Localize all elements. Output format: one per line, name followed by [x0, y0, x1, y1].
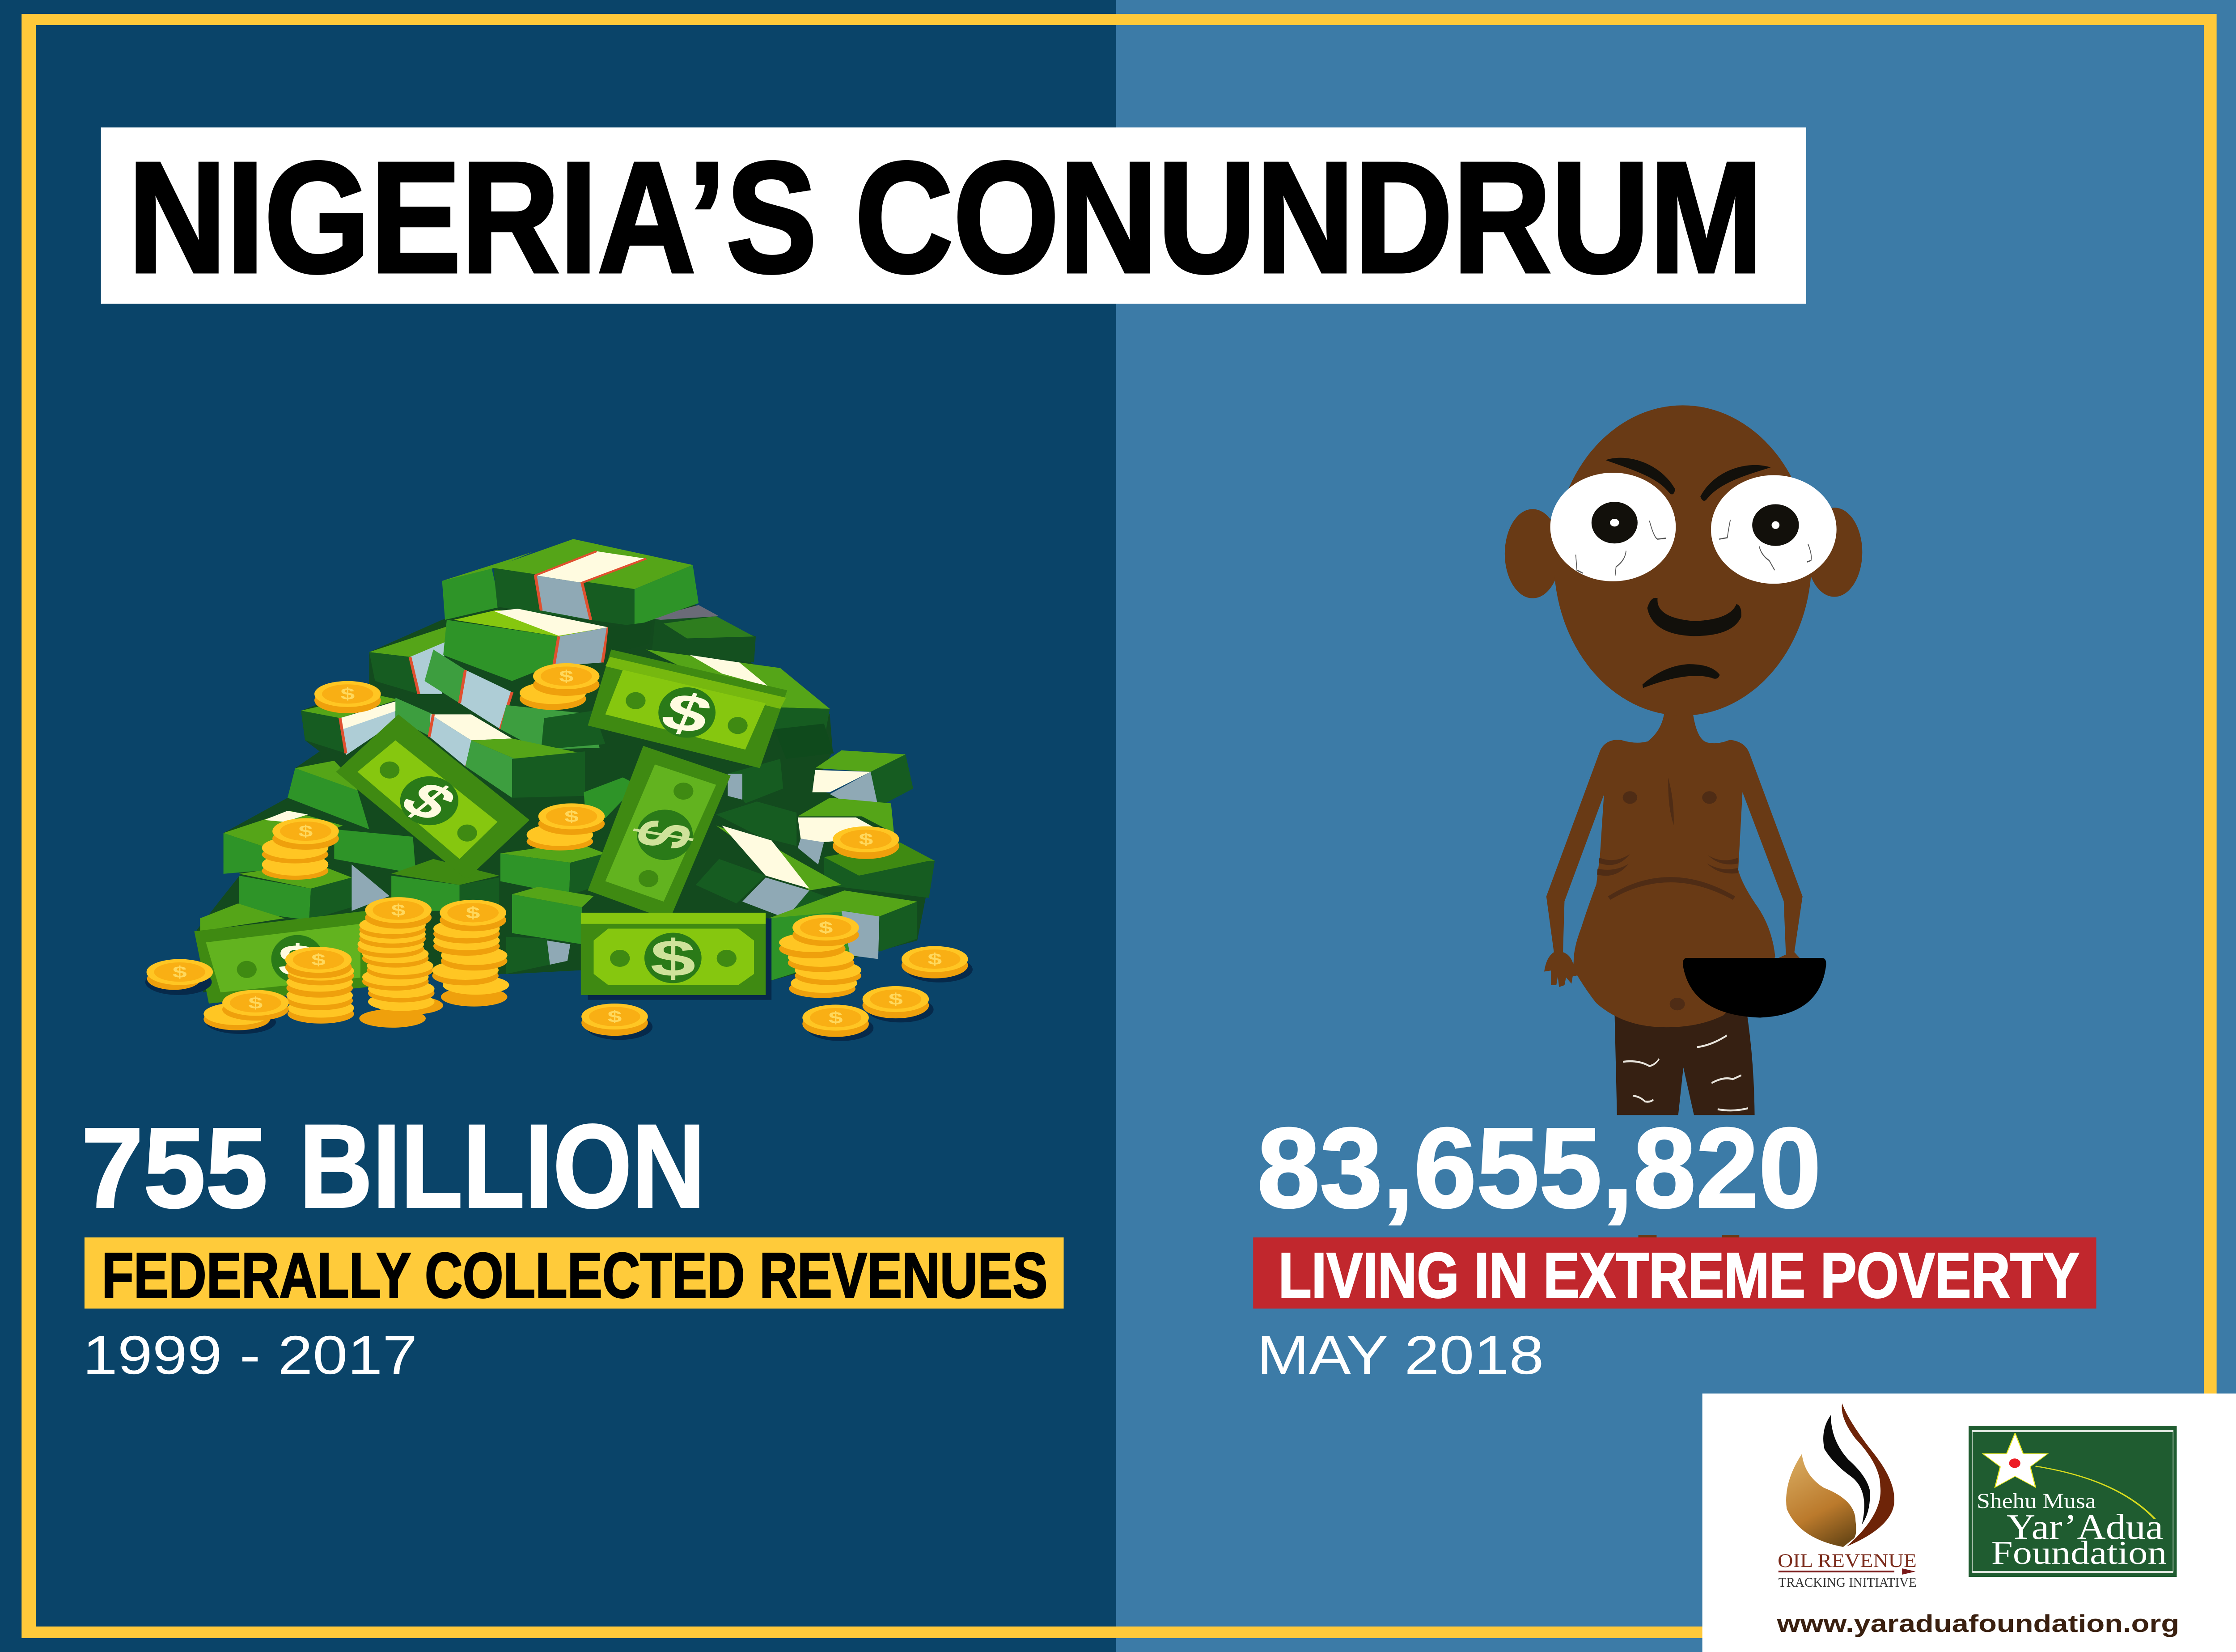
- bundle: lower middle: [506, 937, 570, 974]
- coins: tall stack centre right: $: [466, 904, 480, 922]
- left date: 1999 - 2017: [83, 1324, 417, 1385]
- coins: stack upper centre: [520, 663, 600, 710]
- coins: stack mid centre: $: [564, 807, 579, 826]
- coins: single on left brick: [314, 681, 381, 713]
- left stat: revenue figure: BILLION: [299, 1100, 705, 1233]
- logo: oil revenue tracking initiative: OIL REVENUE: [1778, 1550, 1917, 1572]
- bundle: lower centre left: [391, 859, 499, 911]
- logo panel: [1702, 1394, 2236, 1652]
- left label banner: FEDERALLY COLLECTED REVENUES: [102, 1240, 1048, 1311]
- bundle: top of pile: [442, 539, 699, 626]
- bundle: centre left: [395, 698, 585, 798]
- coins: pair bottom left: $: [248, 994, 263, 1012]
- body details: [1597, 778, 1738, 1010]
- pile shadow base: [197, 603, 926, 992]
- illustration: pile of money: [145, 539, 973, 1041]
- coins: stack lower right: [779, 915, 861, 998]
- coins: stack lower right: $: [818, 919, 833, 937]
- coin: right on brick: [833, 826, 899, 859]
- coins: stack left: [262, 818, 339, 880]
- bundle: second tier: [443, 609, 652, 681]
- feet stubs behind the red banner: [1639, 1235, 1739, 1238]
- banknote: upper right: $: [653, 682, 720, 745]
- logo: Shehu Musa Yar'Adua Foundation: Foundation: [1991, 1534, 2167, 1571]
- coin: floor right bottom: [802, 1005, 873, 1041]
- coins: stack mid centre: [527, 803, 605, 851]
- bundle: back upper right: [649, 605, 756, 662]
- banknote: left: $: [386, 772, 471, 831]
- coins: tall stack centre right: [432, 900, 509, 1007]
- logo: Shehu Musa Yar'Adua Foundation: Yar’Adua: [2007, 1507, 2163, 1547]
- bundle: left: [224, 811, 416, 874]
- bundle: centre: [500, 777, 637, 944]
- ears: [1505, 508, 1862, 598]
- logo: oil revenue tracking initiative: TRACKING INITIATIVE: [1779, 1575, 1917, 1590]
- bundle: slanted third tier: [424, 649, 606, 750]
- eyes: [1550, 473, 1837, 584]
- coins: front left stack: [285, 947, 354, 1024]
- coin: floor right middle: [863, 986, 934, 1022]
- left stat: revenue figure: [81, 1100, 705, 1233]
- coin: floor right top: $: [927, 950, 942, 968]
- banknote: centre: $: [618, 815, 710, 855]
- coins: pair bottom left: [203, 990, 289, 1034]
- body: [1544, 710, 1803, 1027]
- banknote: left: [336, 714, 529, 879]
- panel: left dark blue background: [0, 0, 1116, 1652]
- banknote: front left: [194, 911, 369, 1004]
- coin: far left: [145, 959, 213, 995]
- logo: Shehu Musa Yar'Adua Foundation: [1969, 1426, 2177, 1577]
- coin: floor right top: [902, 946, 973, 983]
- eyebrows: [1605, 458, 1771, 501]
- bundle: lower right: [769, 890, 917, 981]
- banknote: front left: $: [278, 936, 317, 985]
- bundle: middle left block: [288, 761, 369, 829]
- bundle: far right: [812, 750, 913, 818]
- right stat: poverty figure: 83,655,820: [1257, 1105, 1821, 1232]
- logo: Shehu Musa Yar'Adua Foundation: Shehu Musa: [1977, 1489, 2096, 1513]
- coins: tall stack centre left: [357, 897, 443, 1028]
- bundle: upper left: [369, 626, 448, 694]
- coin: floor centre: $: [607, 1008, 622, 1026]
- coins: stack left: $: [298, 822, 313, 840]
- panel: right light blue background: [1116, 0, 2236, 1652]
- banknote: centre: [588, 746, 731, 920]
- logo: oil revenue tracking initiative: [1778, 1403, 1917, 1590]
- banknote: front: $: [650, 930, 696, 987]
- coins: front left stack: $: [311, 951, 326, 969]
- trousers: [1614, 1010, 1755, 1115]
- bundle: right middle: [716, 759, 935, 898]
- coins: tall stack centre left: $: [391, 901, 406, 919]
- bundle: slanted right: [696, 826, 850, 918]
- bundle: lower left: [239, 863, 390, 920]
- banknote: front: [581, 913, 771, 1000]
- nose: [1647, 598, 1741, 636]
- bundle: right behind note: [646, 649, 834, 759]
- banknote: upper right: [588, 649, 787, 768]
- left stat: revenue figure: 755: [81, 1105, 268, 1232]
- bundle: left with coin: [301, 694, 398, 762]
- coin: floor right middle: $: [889, 990, 903, 1008]
- coins: stack upper centre: $: [559, 667, 574, 686]
- begging bowl: [1683, 958, 1826, 1017]
- coins: single on left brick: $: [340, 685, 355, 703]
- coin: right on brick: $: [859, 830, 873, 849]
- website address: www.yaraduafoundation.org: [1776, 1610, 2179, 1637]
- right label banner: LIVING IN EXTREME POVERTY: [1279, 1240, 2079, 1311]
- bundle: behind front-left note: [200, 903, 285, 931]
- coin: floor right bottom: $: [829, 1008, 843, 1027]
- right date: MAY 2018: [1257, 1324, 1544, 1385]
- coin: floor centre: [581, 1004, 652, 1040]
- title banner: NIGERIA’S CONUNDRUM: [128, 129, 1763, 306]
- illustration: impoverished man: [1505, 405, 1862, 1115]
- coin: far left: $: [173, 963, 187, 981]
- mouth: [1643, 664, 1720, 688]
- head: [1554, 405, 1812, 716]
